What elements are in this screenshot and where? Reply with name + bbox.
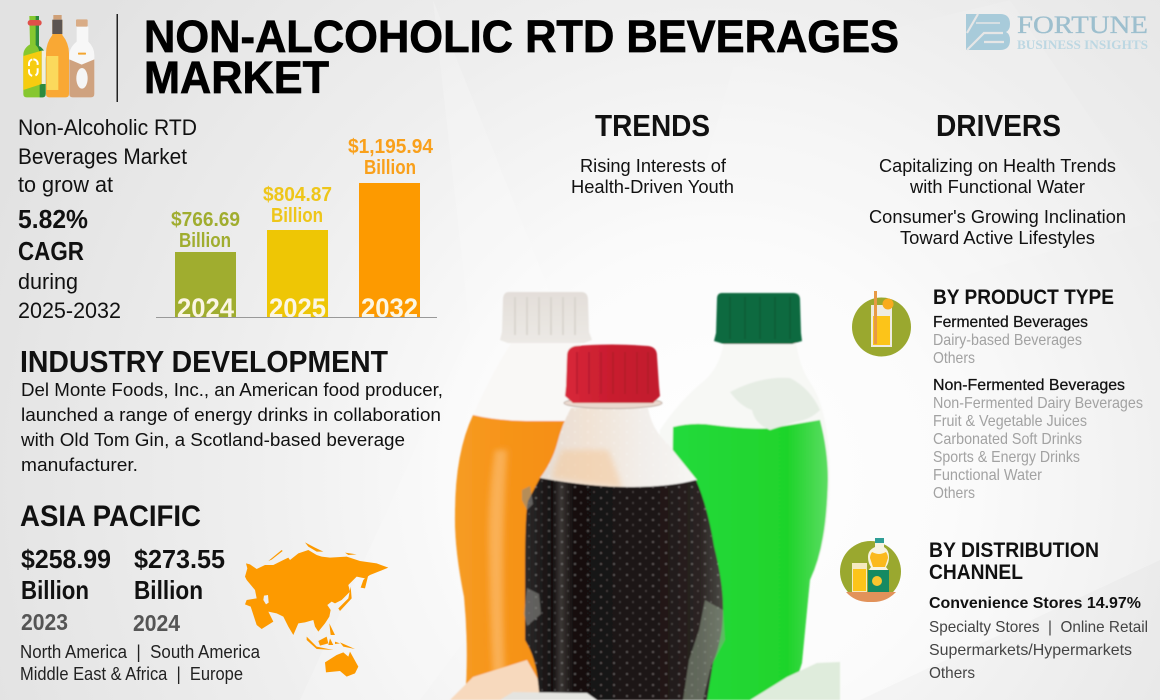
title: NON-ALCOHOLIC RTD BEVERAGES: [144, 11, 899, 62]
bar 2032: [348, 136, 434, 323]
asia pacific figures: ASIA PACIFIC: [20, 500, 201, 533]
drivers: DRIVERS: [936, 108, 1061, 143]
distribution channel segment: [929, 539, 1148, 682]
distribution channel segment: BY DISTRIBUTION: [929, 539, 1099, 562]
photo: drink bottles: [450, 292, 840, 700]
asia pacific figures: North America | South America: [20, 642, 261, 662]
product type segment: Carbonated Soft Drinks: [933, 431, 1082, 448]
trends: Rising Interests of: [580, 156, 727, 176]
trends: TRENDS: [595, 108, 710, 143]
trends: Health-Driven Youth: [571, 177, 734, 197]
bar chart: market size: [156, 136, 437, 323]
logo: Fortune Business Insights: FORTUNE: [1017, 12, 1148, 39]
industry development: with Old Tom Gin, a Scotland-based beverage: [20, 430, 405, 450]
orange bottle icon: [46, 15, 69, 97]
bar 2024: 2024: [177, 293, 234, 323]
industry development: manufacturer.: [21, 455, 138, 475]
growth summary text: Beverages Market: [18, 144, 187, 169]
product type segment: Non-Fermented Beverages: [933, 377, 1125, 394]
bar 2024: [171, 209, 240, 323]
orange bottle: [455, 292, 628, 700]
white bottle icon: [69, 19, 94, 97]
bar 2025: 2025: [269, 293, 326, 323]
growth summary text: to grow at: [18, 172, 113, 197]
logo: Fortune Business Insights: BUSINESS INSIGHTS: [1017, 37, 1148, 52]
bar 2025: [263, 184, 332, 323]
distribution channel segment: Specialty Stores | Online Retail: [929, 619, 1148, 636]
growth summary text: during: [18, 269, 78, 294]
bar 2032: Billion: [364, 157, 416, 179]
cola bottle: [500, 344, 725, 700]
product type segment: Fermented Beverages: [933, 314, 1088, 331]
growth summary text: CAGR: [18, 236, 84, 266]
distribution channel segment: Convenience Stores 14.97%: [929, 595, 1141, 612]
header divider: [116, 14, 118, 102]
title: [144, 11, 899, 103]
product type segment: Functional Water: [933, 467, 1043, 484]
asia pacific figures: $258.99: [21, 544, 111, 574]
bar 2032: 2032: [361, 293, 418, 323]
green bottle: [650, 293, 830, 700]
drivers: [869, 108, 1126, 248]
distribution channel segment: CHANNEL: [929, 561, 1023, 584]
bar 2032: $1,195.94: [348, 136, 434, 158]
distribution channel segment: Supermarkets/Hypermarkets: [929, 642, 1132, 659]
asia pacific figures: Middle East & Africa | Europe: [20, 664, 243, 684]
bar 2024: $766.69: [171, 209, 240, 231]
icon: juice glass: [852, 291, 911, 356]
product type segment: Fruit & Vegetable Juices: [933, 413, 1087, 430]
industry development: Del Monte Foods, Inc., an American food producer,: [21, 380, 443, 400]
asia pacific figures: Billion: [134, 575, 203, 605]
drivers: Capitalizing on Health Trends: [879, 156, 1116, 176]
icon: juice bottle and glass: [840, 538, 901, 602]
header icon: three bottles: [23, 15, 94, 97]
product type segment: Others: [933, 485, 975, 502]
product type segment: Dairy-based Beverages: [933, 332, 1082, 349]
asia pacific figures: 2024: [133, 610, 180, 636]
industry development: launched a range of energy drinks in collaboration: [21, 405, 441, 425]
map: Asia Pacific: [245, 542, 388, 677]
industry development: [20, 344, 443, 475]
product type segment: Others: [933, 350, 975, 367]
logo: Fortune Business Insights: [966, 12, 1148, 52]
growth summary text: Non-Alcoholic RTD: [18, 115, 197, 140]
bar 2025: $804.87: [263, 184, 332, 206]
growth summary text: 2025-2032: [18, 298, 121, 323]
ice cubes: [450, 660, 840, 700]
product type segment: [933, 286, 1143, 502]
green bottle icon: [23, 16, 46, 97]
bar 2024: Billion: [179, 230, 231, 252]
asia pacific figures: $273.55: [134, 544, 225, 574]
product type segment: Sports & Energy Drinks: [933, 449, 1080, 466]
title: MARKET: [144, 52, 329, 103]
trends: [571, 108, 734, 197]
asia pacific figures: Billion: [21, 575, 89, 605]
asia pacific figures: [20, 500, 261, 684]
industry development: INDUSTRY DEVELOPMENT: [20, 344, 388, 379]
drivers: Toward Active Lifestyles: [900, 228, 1095, 248]
growth summary text: 5.82%: [18, 204, 88, 234]
drivers: Consumer's Growing Inclination: [869, 207, 1126, 227]
drivers: with Functional Water: [909, 177, 1085, 197]
product type segment: BY PRODUCT TYPE: [933, 286, 1114, 309]
bar 2025: Billion: [271, 205, 323, 227]
distribution channel segment: Others: [929, 665, 975, 682]
asia pacific figures: 2023: [21, 609, 68, 635]
growth summary text: [18, 115, 197, 323]
